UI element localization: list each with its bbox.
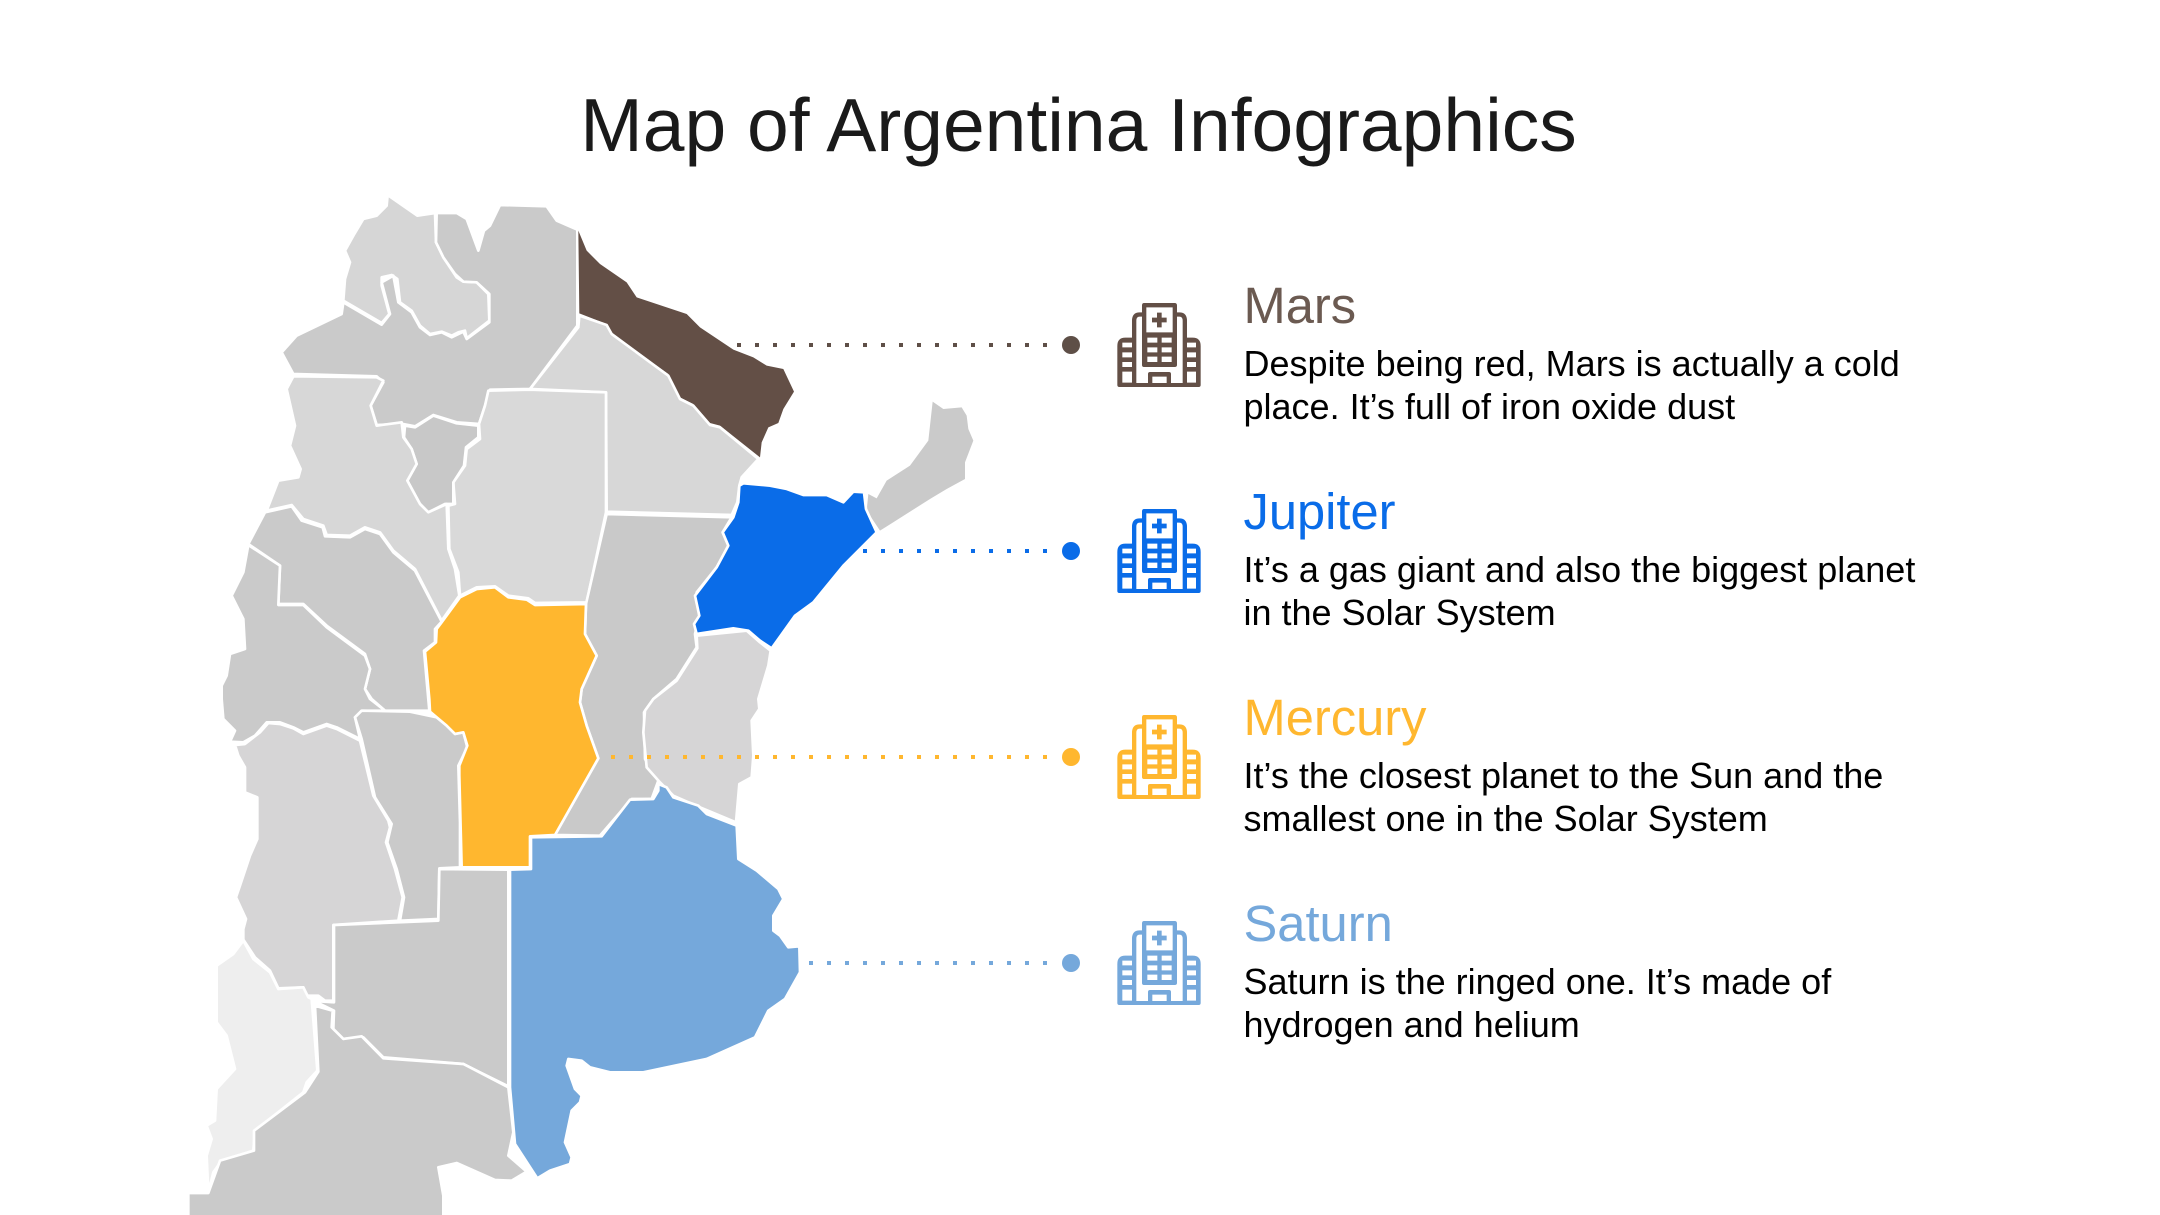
- region: western grey province: [248, 506, 442, 711]
- map of Argentina: [188, 195, 973, 1215]
- icon: Jupiter hospital: [1117, 509, 1201, 593]
- text: Jupiter description: It’s a gas giant and also the biggest planet: [1244, 549, 1915, 590]
- region: far western grey province: [222, 545, 385, 742]
- text: Saturn description: hydrogen and helium: [1244, 1004, 1580, 1045]
- text: Saturn description: Saturn is the ringed one. It’s made of: [1244, 961, 1832, 1002]
- connector: Mercury: [611, 748, 1080, 766]
- heading: Jupiter: Jupiter: [1244, 483, 1396, 540]
- text: Mercury description: smallest one in the Solar System: [1244, 798, 1768, 839]
- text: Mars description: Despite being red, Mars is actually a cold: [1244, 343, 1900, 384]
- connector: Jupiter: [863, 542, 1080, 560]
- icon: Mercury hospital: [1117, 715, 1201, 799]
- region: north-east grey province: [867, 402, 973, 531]
- region: small grey province: [404, 416, 478, 512]
- region: southern grey province: [188, 1006, 527, 1215]
- region: Jupiter highlighted province: [694, 483, 877, 648]
- heading: Mars: Mars: [1244, 277, 1356, 334]
- item: Mercury: [611, 689, 1883, 839]
- heading: Saturn: Saturn: [1244, 895, 1393, 952]
- connector: Saturn: [809, 954, 1080, 972]
- item: Mars: [737, 277, 1900, 427]
- text: Jupiter description: in the Solar System: [1244, 592, 1556, 633]
- title: Map of Argentina Infographics: [580, 83, 1577, 167]
- icon: Mars hospital: [1117, 303, 1201, 387]
- region: north-central province: [530, 316, 758, 515]
- text: Mercury description: It’s the closest planet to the Sun and the: [1244, 755, 1883, 796]
- text: Mars description: place. It’s full of iron oxide dust: [1244, 386, 1735, 427]
- region: La Pampa grey province: [314, 869, 508, 1086]
- region: central square province: [448, 390, 606, 603]
- region: central grey province: [355, 711, 467, 921]
- region: east-central grey province: [555, 514, 732, 836]
- connector: Mars: [737, 336, 1080, 354]
- region: Mercury highlighted province: [425, 587, 598, 867]
- region: eastern light province: [643, 631, 771, 822]
- item: Jupiter: [863, 483, 1915, 633]
- region: Saturn highlighted province: [510, 784, 800, 1178]
- region: central-west light province: [235, 723, 403, 1001]
- region: Mars highlighted province: [578, 231, 794, 457]
- heading: Mercury: Mercury: [1244, 689, 1427, 746]
- icon: Saturn hospital: [1117, 921, 1201, 1005]
- region: north-west light province: [343, 195, 489, 338]
- region: western light province: [267, 376, 459, 621]
- item: Saturn: [809, 895, 1832, 1045]
- region: pale south-west province: [207, 941, 317, 1192]
- region: north-west grey province: [282, 205, 577, 426]
